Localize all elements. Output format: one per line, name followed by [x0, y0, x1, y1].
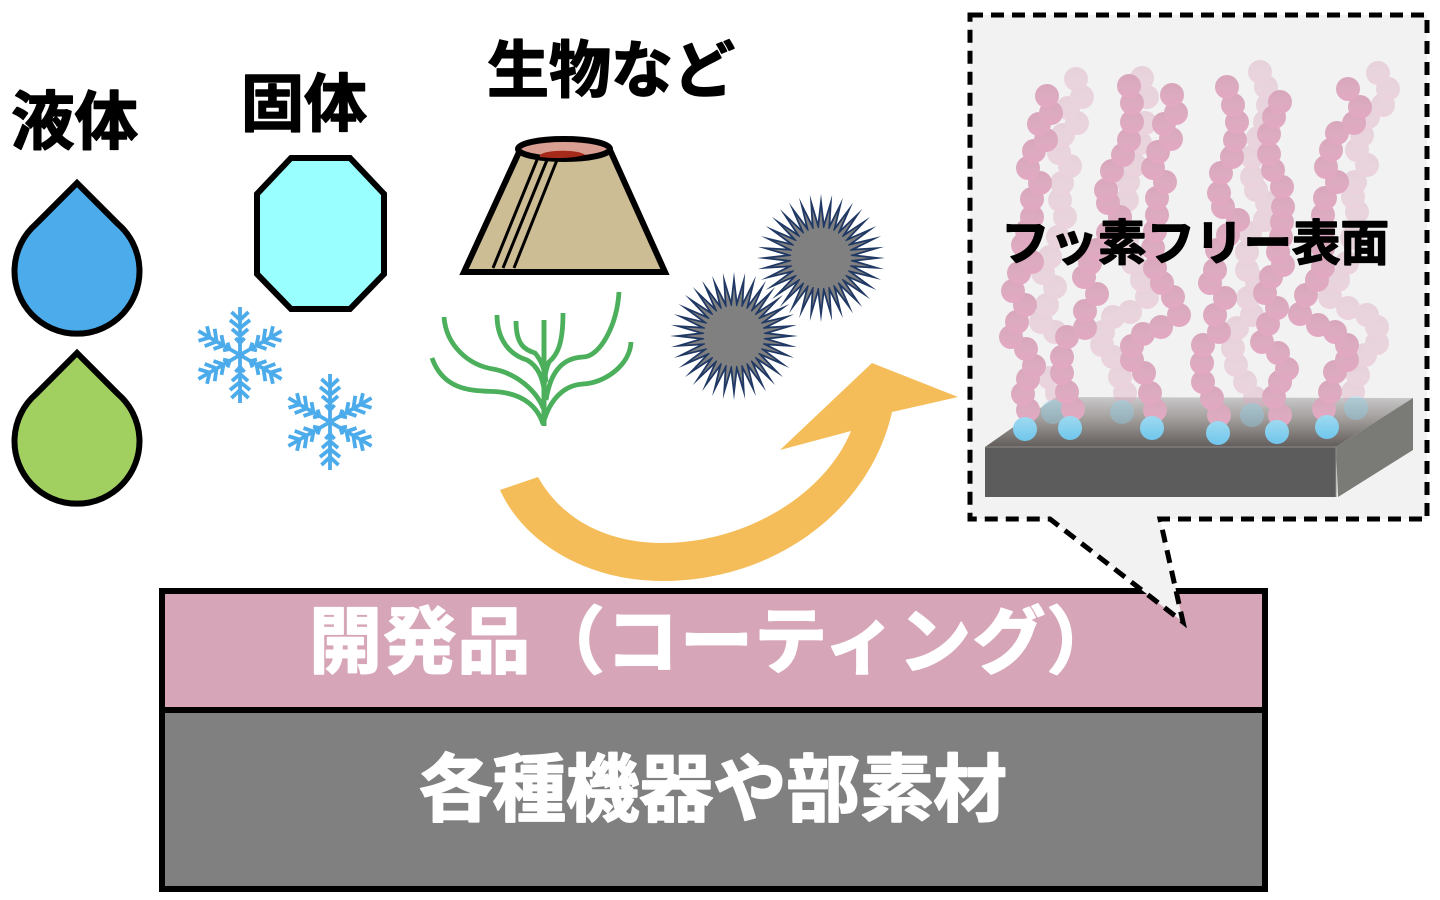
icon: snowflake right [283, 374, 377, 470]
icon: spiky particle lower [666, 268, 802, 404]
layer: coating pink [165, 594, 1262, 707]
arrow: curved orange [500, 363, 958, 581]
icon: snowflake left [193, 307, 287, 403]
heading: solid: 固体 [241, 70, 367, 140]
illustration: substrate block [985, 397, 1413, 497]
label: developed coating: 開発品（コーティング） [309, 602, 1121, 683]
panel: base stack [162, 591, 1265, 889]
illustration: front molecular chains [999, 74, 1372, 445]
icon: blue water drop [14, 183, 139, 334]
icon: plant [432, 292, 631, 426]
illustration: pale back molecular chains [1029, 60, 1400, 427]
icon: solid octagon [257, 158, 384, 309]
label: various equipment and materials: 各種機器や部素材 [419, 748, 1007, 831]
callout: zoomed surface bubble [970, 15, 1427, 622]
divider line [165, 707, 1262, 713]
icon: spiky particle upper [753, 190, 889, 326]
heading: organisms etc: 生物など [487, 37, 735, 106]
label: fluorine-free surface: フッ素フリー表面 [1001, 217, 1389, 271]
icon: volcano [464, 139, 665, 272]
icon: green liquid drop [14, 353, 139, 504]
heading: liquid: 液体 [11, 88, 138, 158]
